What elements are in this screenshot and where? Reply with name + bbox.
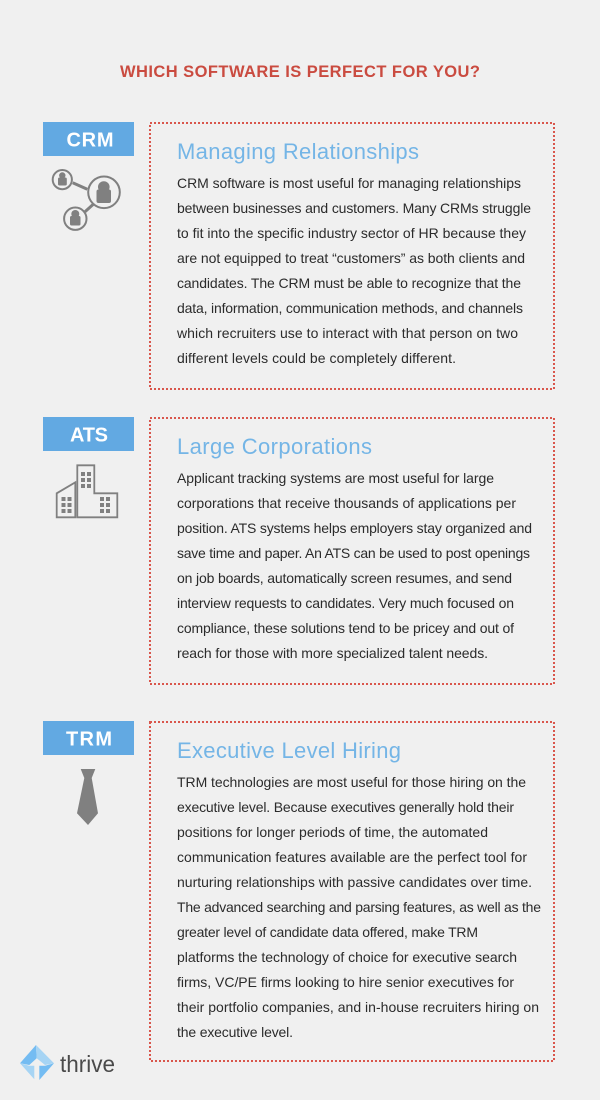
- text block: which recruiters use to interact with that person on two: [176, 325, 518, 341]
- text block: on job boards, automatically screen resumes, and send: [177, 570, 512, 586]
- text block: [177, 774, 541, 1040]
- text block: data, information, communication methods, and channels: [177, 300, 523, 316]
- label: CRM: [43, 122, 134, 156]
- heading: Managing Relationships: [177, 139, 419, 164]
- text block: the executive level.: [177, 1024, 293, 1040]
- text block: candidates. The CRM must be able to recognize that the: [177, 275, 521, 291]
- text block: their portfolio companies, and in-house recruiters hiring on: [177, 999, 539, 1015]
- title: WHICH SOFTWARE IS PERFECT FOR YOU?: [120, 63, 480, 81]
- text block: communication features available are the perfect tool for: [177, 849, 527, 865]
- section: ATS: [43, 417, 554, 684]
- text block: different levels could be completely different.: [177, 350, 456, 366]
- text block: executive level. Because executives generally hold their: [177, 799, 514, 815]
- text block: platforms the technology of choice for executive search: [177, 949, 517, 965]
- text block: save time and paper. An ATS can be used to post openings: [177, 545, 530, 561]
- text block: corporations that receive thousands of applications per: [177, 495, 516, 511]
- text block: positions for longer periods of time, the automated: [177, 824, 488, 840]
- text block: firms, VC/PE firms looking to hire senior executives for: [177, 974, 514, 990]
- label: TRM: TRM: [66, 728, 112, 750]
- label: ATS: [43, 417, 134, 451]
- text block: compliance, these solutions tend to be pricey and out of: [177, 620, 514, 636]
- icon: connected people network: [53, 170, 120, 230]
- heading: Executive Level Hiring: [177, 738, 401, 763]
- text block: greater level of candidate data offered, make TRM: [177, 924, 478, 940]
- panel: managing relationships: [150, 123, 554, 389]
- heading: Large Corporations: [177, 434, 372, 459]
- label: TRM: [43, 721, 134, 755]
- text block: [177, 470, 532, 661]
- icon: thrive arrow: [20, 1045, 54, 1080]
- section: TRM: [43, 721, 554, 1061]
- text block: The advanced searching and parsing features, as well as the: [177, 899, 541, 915]
- text block: CRM software is most useful for managing relationships: [177, 175, 521, 191]
- text block: are not equipped to treat “customers” as both clients and: [177, 250, 525, 266]
- icon: office buildings: [57, 465, 117, 517]
- section: CRM: [43, 122, 554, 389]
- text block: [176, 175, 531, 366]
- text block: reach for those with more specialized talent needs.: [177, 645, 488, 661]
- text block: Applicant tracking systems are most useful for large: [177, 470, 494, 486]
- text block: between businesses and customers. Many CRMs struggle: [177, 200, 531, 216]
- panel: executive level hiring: [150, 722, 554, 1061]
- text block: interview requests to candidates. Very much focused on: [177, 595, 514, 611]
- text block: TRM technologies are most useful for those hiring on the: [177, 774, 526, 790]
- logo: thrive: [20, 1045, 115, 1080]
- wordmark: thrive: [60, 1051, 115, 1077]
- icon: necktie: [77, 769, 98, 825]
- label: ATS: ATS: [70, 424, 108, 446]
- text block: to fit into the specific industry sector of HR because they: [177, 225, 526, 241]
- text block: nurturing relationships with passive candidates over time.: [177, 874, 532, 890]
- label: CRM: CRM: [66, 130, 114, 152]
- text block: position. ATS systems helps employers stay organized and: [177, 520, 532, 536]
- panel: large corporations: [150, 418, 554, 684]
